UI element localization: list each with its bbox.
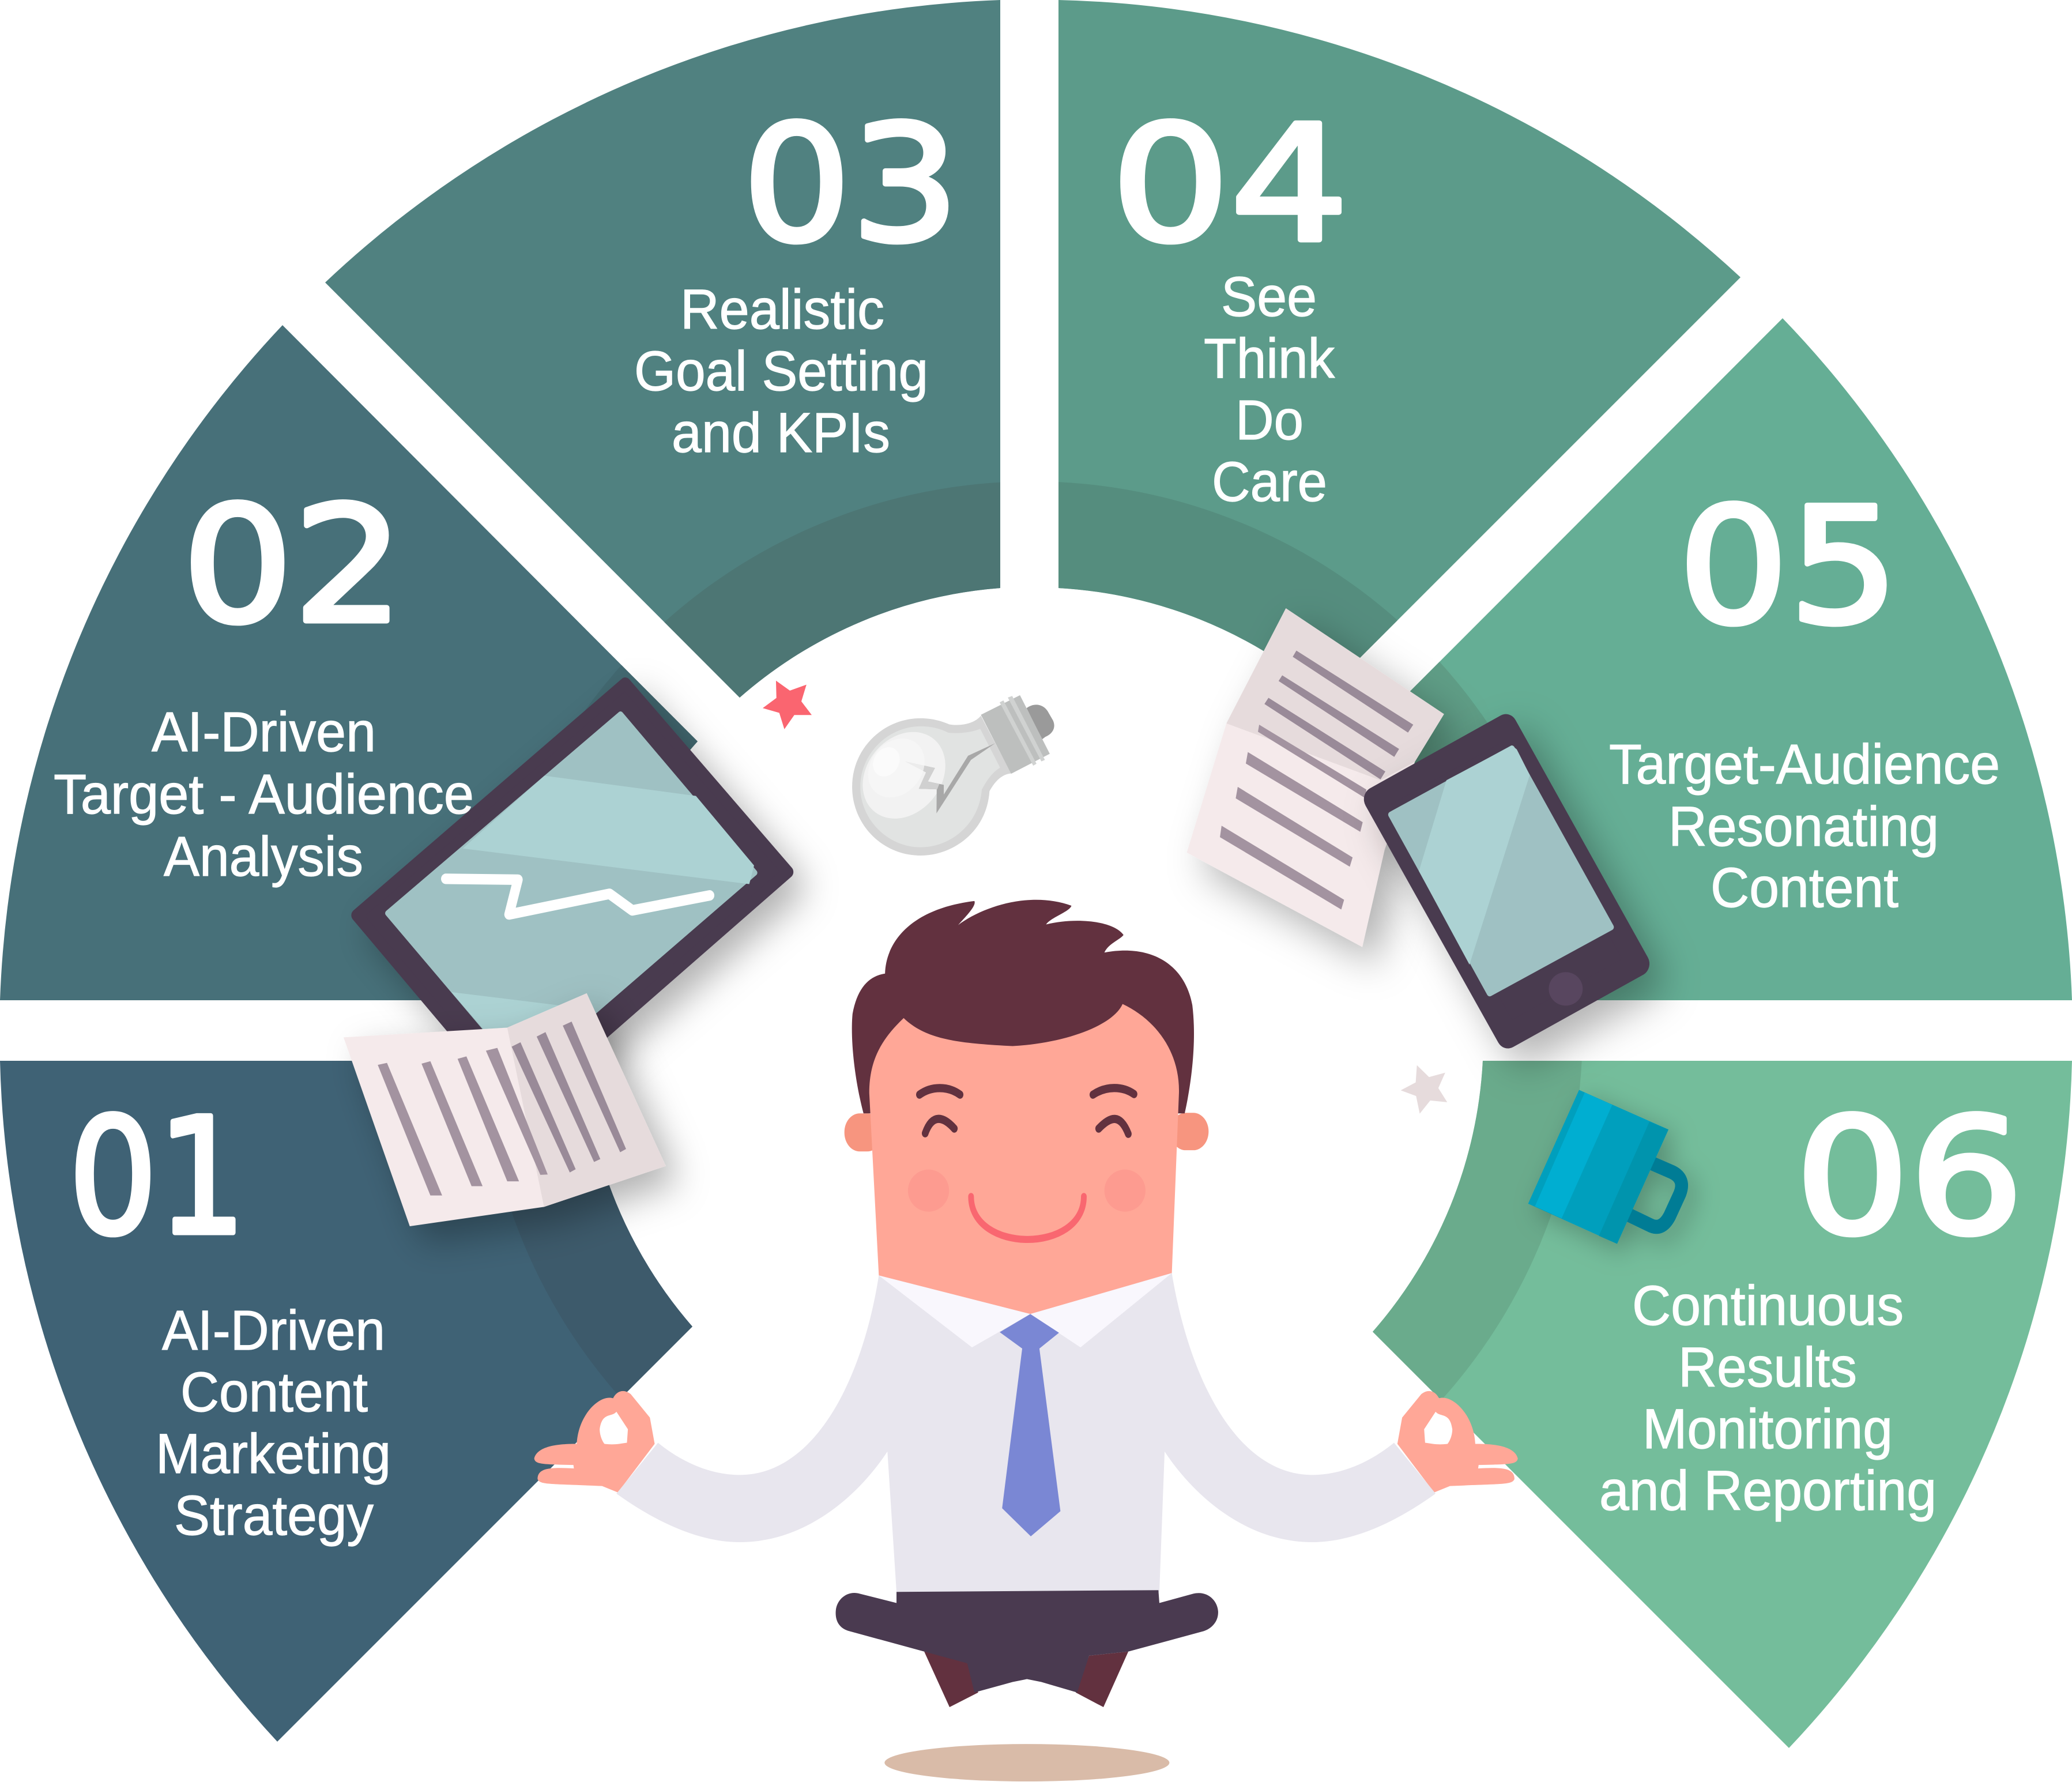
icon: folded paper right bbox=[1187, 608, 1444, 947]
icon: smartphone bbox=[1375, 726, 1638, 1036]
face bbox=[869, 1004, 1179, 1314]
shirt and arms bbox=[616, 1273, 1436, 1592]
right hand bbox=[1397, 1391, 1518, 1493]
text block: step 04 label: See bbox=[1221, 265, 1317, 328]
panel: segment 05 bbox=[1366, 318, 2072, 1000]
text block: step 02 label: Target - Audience bbox=[54, 763, 474, 826]
text block: step 04 label: Care bbox=[1212, 450, 1327, 513]
icon: coffee mug bbox=[1528, 1090, 1682, 1244]
heading: number 05: 05 bbox=[1678, 473, 1899, 660]
text block: step 06 label: and Reporting bbox=[1599, 1459, 1937, 1522]
text block: step 05 label bbox=[1609, 733, 2000, 919]
heading: number 04: 04 bbox=[1111, 91, 1349, 278]
eyebrows and eyes bbox=[920, 1088, 1134, 1134]
heading: number 02: 02 bbox=[182, 472, 404, 659]
icon: tablet bbox=[357, 684, 788, 1107]
trousers bbox=[836, 1590, 1218, 1693]
text block: step 06 label bbox=[1599, 1274, 1937, 1522]
panel: segment 03 bbox=[325, 0, 1000, 698]
text block: step 03 label: Goal Setting bbox=[634, 340, 928, 402]
text block: step 04 label bbox=[1204, 265, 1335, 513]
panel: segment 04 bbox=[1058, 0, 1741, 694]
text block: step 06 label: Monitoring bbox=[1642, 1397, 1893, 1460]
text block: step 01 label: Marketing bbox=[156, 1422, 391, 1485]
icon: open paper left bbox=[344, 993, 666, 1226]
text block: step 06 label: Continuous bbox=[1632, 1274, 1904, 1337]
text block: step 02 label bbox=[54, 700, 474, 888]
smile bbox=[971, 1196, 1084, 1240]
hair bbox=[852, 900, 1194, 1113]
collar bbox=[879, 1273, 1172, 1347]
tie bbox=[1000, 1314, 1060, 1536]
icon: grey star bbox=[1401, 1065, 1447, 1114]
text block: step 01 label bbox=[156, 1299, 391, 1547]
shoes bbox=[924, 1652, 1128, 1707]
text block: step 01 label: AI-Driven bbox=[162, 1299, 385, 1362]
left hand bbox=[534, 1391, 655, 1493]
text block: step 05 label: Resonating bbox=[1668, 795, 1939, 858]
panel: segment 06 bbox=[1373, 1061, 2072, 1748]
text block: step 01 label: Content bbox=[180, 1361, 368, 1423]
ear left bbox=[845, 1113, 883, 1151]
text block: step 05 label: Target-Audience bbox=[1609, 733, 2000, 796]
floor shadow bbox=[884, 1744, 1169, 1781]
text block: step 03 label bbox=[634, 278, 928, 464]
text block: step 03 label: Realistic bbox=[680, 278, 884, 341]
text block: step 02 label: AI-Driven bbox=[152, 700, 376, 763]
ear right bbox=[1170, 1113, 1208, 1150]
text block: step 05 label: Content bbox=[1711, 856, 1898, 919]
cheeks bbox=[908, 1170, 1146, 1212]
text block: step 01 label: Strategy bbox=[174, 1484, 374, 1547]
heading: number 03: 03 bbox=[743, 91, 959, 278]
text block: step 03 label: and KPIs bbox=[672, 401, 890, 464]
text block: step 06 label: Results bbox=[1678, 1336, 1857, 1399]
panel: segment 01 bbox=[0, 1061, 692, 1742]
icon: light bulb bbox=[847, 695, 1054, 856]
heading: number 01: 01 bbox=[69, 1084, 246, 1271]
text block: step 04 label: Think bbox=[1204, 327, 1335, 390]
text block: step 02 label: Analysis bbox=[164, 825, 363, 888]
text block: step 04 label: Do bbox=[1235, 389, 1304, 451]
illustration: meditating businessman bbox=[534, 900, 1518, 1781]
icon: red star bbox=[763, 681, 812, 729]
panel: segment 02 bbox=[0, 325, 698, 1000]
heading: number 06: 06 bbox=[1795, 1084, 2024, 1271]
